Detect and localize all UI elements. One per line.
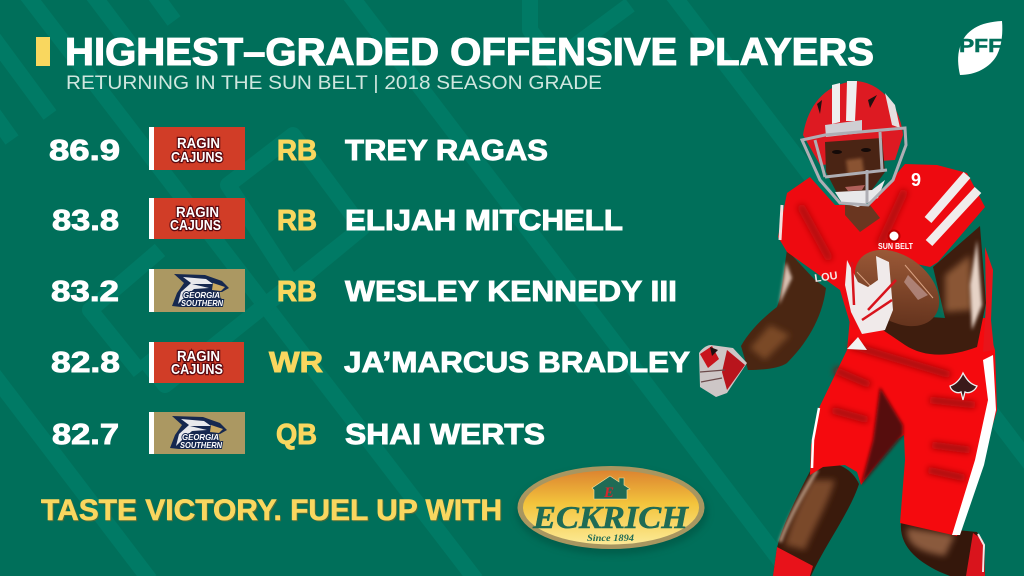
player photo illustration	[699, 81, 997, 576]
team logo: Georgia Southern: SOUTHERN	[180, 441, 222, 450]
left arm	[741, 250, 826, 370]
row 4: Ja'Marcus Bradley: WR	[269, 347, 323, 379]
icon: fleur-de-lis	[950, 373, 977, 400]
PFF logo: PFF	[959, 36, 1002, 56]
team logo: Ragin Cajuns	[149, 198, 245, 239]
row 4: Ja'Marcus Bradley: 82.8	[51, 347, 120, 379]
sponsor logo: Eckrich: Since 1894	[587, 534, 634, 544]
row 3: Wesley Kennedy III: WESLEY KENNEDY III	[345, 276, 677, 308]
row 3: Wesley Kennedy III: 83.2	[51, 276, 119, 308]
row 3: Wesley Kennedy III: RB	[277, 276, 317, 308]
front bumper	[825, 120, 862, 137]
right leg	[901, 522, 985, 576]
subtitle: RETURNING IN THE SUN BELT | 2018 SEASON GRADE	[66, 72, 602, 94]
PFF logo	[958, 21, 1002, 75]
title accent bar	[36, 37, 50, 66]
glove: left hand	[699, 345, 747, 397]
row 4: Ja'Marcus Bradley: JA’MARCUS BRADLEY	[344, 347, 690, 379]
right arm	[877, 226, 994, 355]
row 2: Elijah Mitchell: RB	[277, 205, 317, 237]
row 5: Shai Werts	[52, 412, 545, 454]
row 4: Ja'Marcus Bradley	[51, 342, 690, 383]
chin strap	[835, 180, 885, 207]
row 5: Shai Werts: QB	[276, 419, 317, 451]
facemask	[802, 128, 906, 205]
sleeve stripes	[928, 175, 978, 243]
left leg	[773, 462, 859, 576]
team logo: Georgia Southern	[149, 269, 245, 312]
icon: house	[592, 476, 630, 501]
team logo: Ragin Cajuns: CAJUNS	[171, 149, 223, 166]
team logo: Ragin Cajuns: CAJUNS	[170, 217, 221, 234]
helmet shell	[803, 81, 903, 165]
team logo: Ragin Cajuns: RAGIN	[176, 204, 219, 221]
row 2: Elijah Mitchell: 83.8	[52, 205, 119, 237]
row 1: Trey Ragas: RB	[277, 135, 317, 167]
glove: right hand	[845, 256, 896, 334]
team logo: Georgia Southern: GEORGIA	[183, 291, 220, 300]
team logo: Georgia Southern: GEORGIA	[182, 433, 219, 442]
row 1: Trey Ragas: TREY RAGAS	[345, 135, 548, 167]
row 2: Elijah Mitchell: ELIJAH MITCHELL	[345, 205, 623, 237]
team logo: Ragin Cajuns: RAGIN	[177, 348, 220, 365]
shorts	[810, 318, 997, 536]
neck and helmet	[802, 81, 906, 207]
face	[825, 138, 885, 195]
row 5: Shai Werts: 82.7	[52, 419, 119, 451]
row 1: Trey Ragas	[49, 127, 548, 170]
row 3: Wesley Kennedy III	[51, 269, 677, 312]
title: HIGHEST–GRADED OFFENSIVE PLAYERS	[65, 31, 874, 74]
team logo: Georgia Southern: SOUTHERN	[181, 299, 223, 308]
team logo: Ragin Cajuns: RAGIN	[177, 135, 220, 152]
football	[840, 234, 954, 342]
team logo: Ragin Cajuns	[149, 127, 245, 170]
team logo: Ragin Cajuns: CAJUNS	[171, 361, 223, 378]
team logo: Ragin Cajuns	[149, 342, 244, 383]
sponsor logo: Eckrich	[516, 466, 708, 555]
row 5: Shai Werts: SHAI WERTS	[345, 419, 545, 451]
jersey: LOU	[814, 270, 838, 285]
sun belt patch	[878, 230, 913, 251]
icon: house: E	[603, 485, 614, 501]
sponsor tagline: TASTE VICTORY. FUEL UP WITH	[41, 494, 502, 527]
jersey	[778, 164, 985, 330]
row 2: Elijah Mitchell	[52, 198, 623, 239]
sponsor logo: Eckrich: ECKRICH	[532, 499, 689, 535]
jersey number: 9	[911, 170, 921, 190]
sun belt patch: SUN BELT	[878, 242, 913, 251]
team logo: Georgia Southern	[149, 412, 245, 454]
row 1: Trey Ragas: 86.9	[49, 135, 120, 167]
